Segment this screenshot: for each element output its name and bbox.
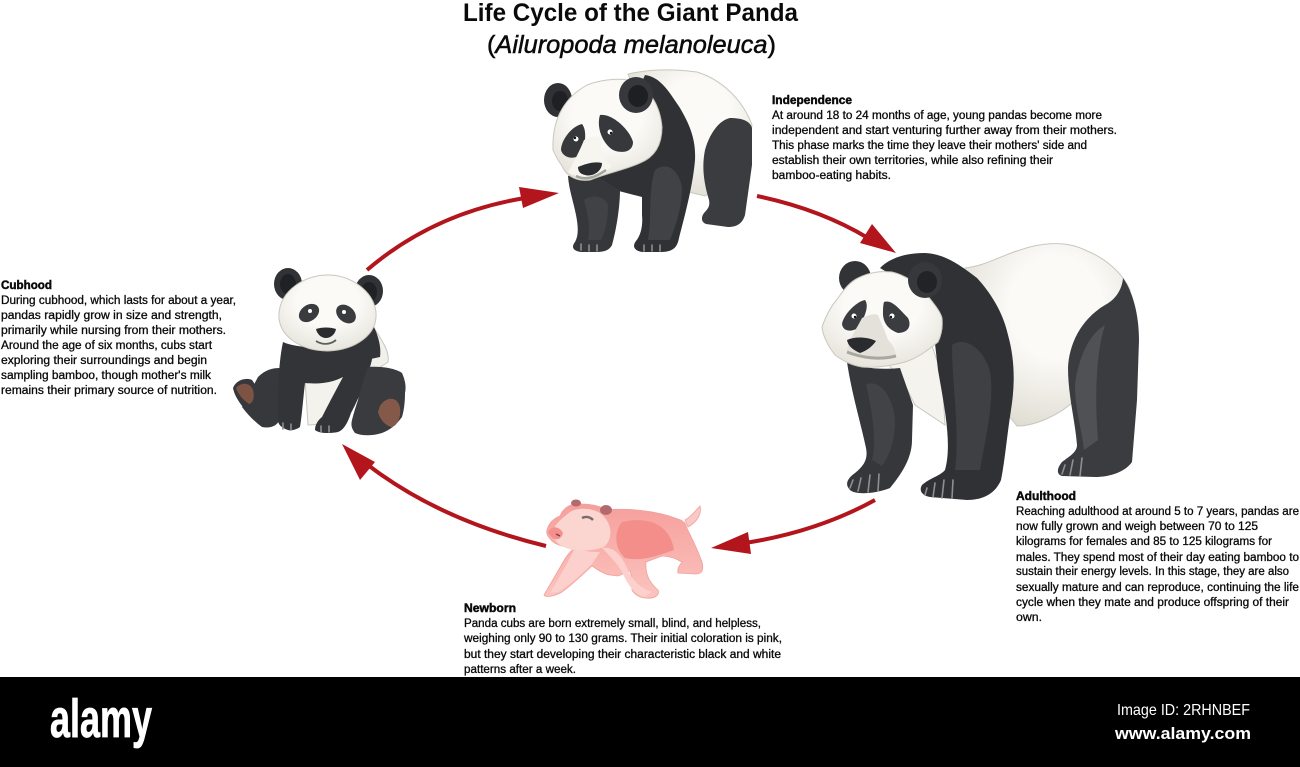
arrow: adulthood to newborn — [711, 500, 875, 554]
text block: cubhood: During cubhood, which lasts for about a year, — [1, 295, 236, 307]
title: (Ailuropoda melanoleuca) — [487, 31, 776, 59]
arrow: cubhood to independence — [367, 187, 559, 270]
text block: independence: bamboo-eating habits. — [772, 170, 891, 182]
text block: adulthood: Adulthood — [1016, 491, 1076, 503]
text block: adulthood: Reaching adulthood at around 5 to 7 years, pandas are — [1016, 506, 1299, 518]
text block: adulthood: now fully grown and weigh between 70 to 125 — [1016, 521, 1258, 533]
title — [463, 0, 799, 59]
text block: newborn: Panda cubs are born extremely small, blind, and helpless, — [464, 618, 761, 630]
icon: adult panda — [822, 244, 1139, 500]
text block: adulthood: cycle when they mate and produce offspring of their — [1016, 597, 1289, 609]
text block: independence: Independence — [772, 95, 852, 107]
text block: cubhood — [1, 280, 236, 397]
text block: independence — [772, 95, 1117, 182]
text block: independence: At around 18 to 24 months of age, young pandas become more — [772, 110, 1102, 122]
icon: newborn panda — [544, 500, 703, 598]
arrow: newborn to cubhood — [342, 444, 546, 546]
text block: cubhood: Cubhood — [1, 280, 52, 292]
text block: newborn: but they start developing their characteristic black and white — [464, 649, 781, 661]
text block: newborn: weighing only 90 to 130 grams. Their initial coloration is pink, — [463, 633, 782, 645]
text block: cubhood: exploring their surroundings and begin — [1, 355, 207, 367]
text block: independence: independent and start venturing further away from their mothers. — [772, 125, 1117, 137]
website: www.alamy.com — [1114, 724, 1251, 743]
text block: cubhood: Around the age of six months, cubs start — [1, 340, 213, 352]
text block: independence: This phase marks the time they leave their mothers' side and — [772, 140, 1087, 152]
text block: adulthood: kilograms for females and 85 to 125 kilograms for — [1016, 536, 1272, 548]
text block: independence: establish their own territories, while also refining their — [772, 155, 1053, 167]
text block: newborn: patterns after a week. — [464, 664, 576, 676]
text block: newborn: Newborn — [464, 603, 516, 615]
arrow: independence to adulthood — [757, 196, 896, 253]
text block: adulthood: males. They spend most of their day eating bamboo to — [1016, 552, 1299, 564]
image id: Image ID: 2RHNBEF — [1117, 702, 1250, 719]
icon: independence panda — [544, 70, 752, 252]
text block: cubhood: primarily while nursing from their mothers. — [1, 325, 226, 337]
text block: cubhood: sampling bamboo, though mother's milk — [1, 370, 211, 382]
text block: newborn — [463, 603, 782, 676]
text block: adulthood: own. — [1016, 612, 1042, 624]
text block: cubhood: pandas rapidly grow in size and strength, — [1, 310, 222, 322]
text block: cubhood: remains their primary source of nutrition. — [1, 385, 217, 397]
text block: adulthood — [1016, 491, 1299, 624]
icon: cub panda — [233, 268, 406, 435]
footer bar — [0, 677, 1300, 767]
text block: adulthood: sustain their energy levels. In this stage, they are also — [1016, 566, 1289, 578]
text block: adulthood: sexually mature and can reproduce, continuing the life — [1016, 582, 1299, 594]
logo: alamy: alamy — [50, 689, 152, 749]
